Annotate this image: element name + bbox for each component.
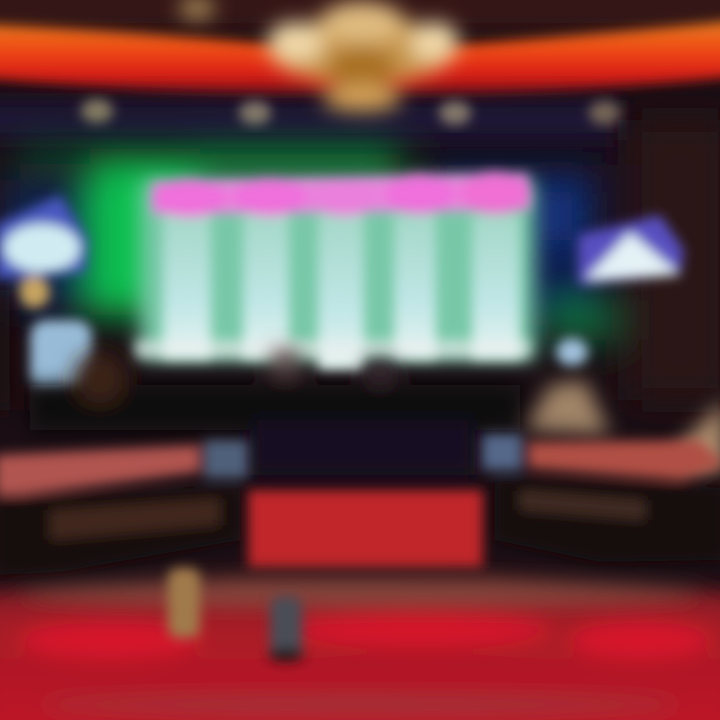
centre red carpet xyxy=(248,490,483,568)
ceiling xyxy=(0,0,720,140)
screen columns xyxy=(163,215,520,370)
red patterned floor xyxy=(0,576,720,720)
side cloud screens xyxy=(0,195,684,390)
green and blue backdrop xyxy=(0,120,720,400)
right table xyxy=(482,434,720,562)
ceiling lights band xyxy=(0,20,720,94)
chandelier xyxy=(179,0,459,112)
spotlights xyxy=(81,99,621,125)
stage screen xyxy=(140,180,535,360)
floor objects xyxy=(168,568,304,662)
left table xyxy=(0,440,248,575)
right figures xyxy=(525,380,720,470)
audience silhouettes xyxy=(0,290,520,475)
screen pink header xyxy=(152,172,531,217)
